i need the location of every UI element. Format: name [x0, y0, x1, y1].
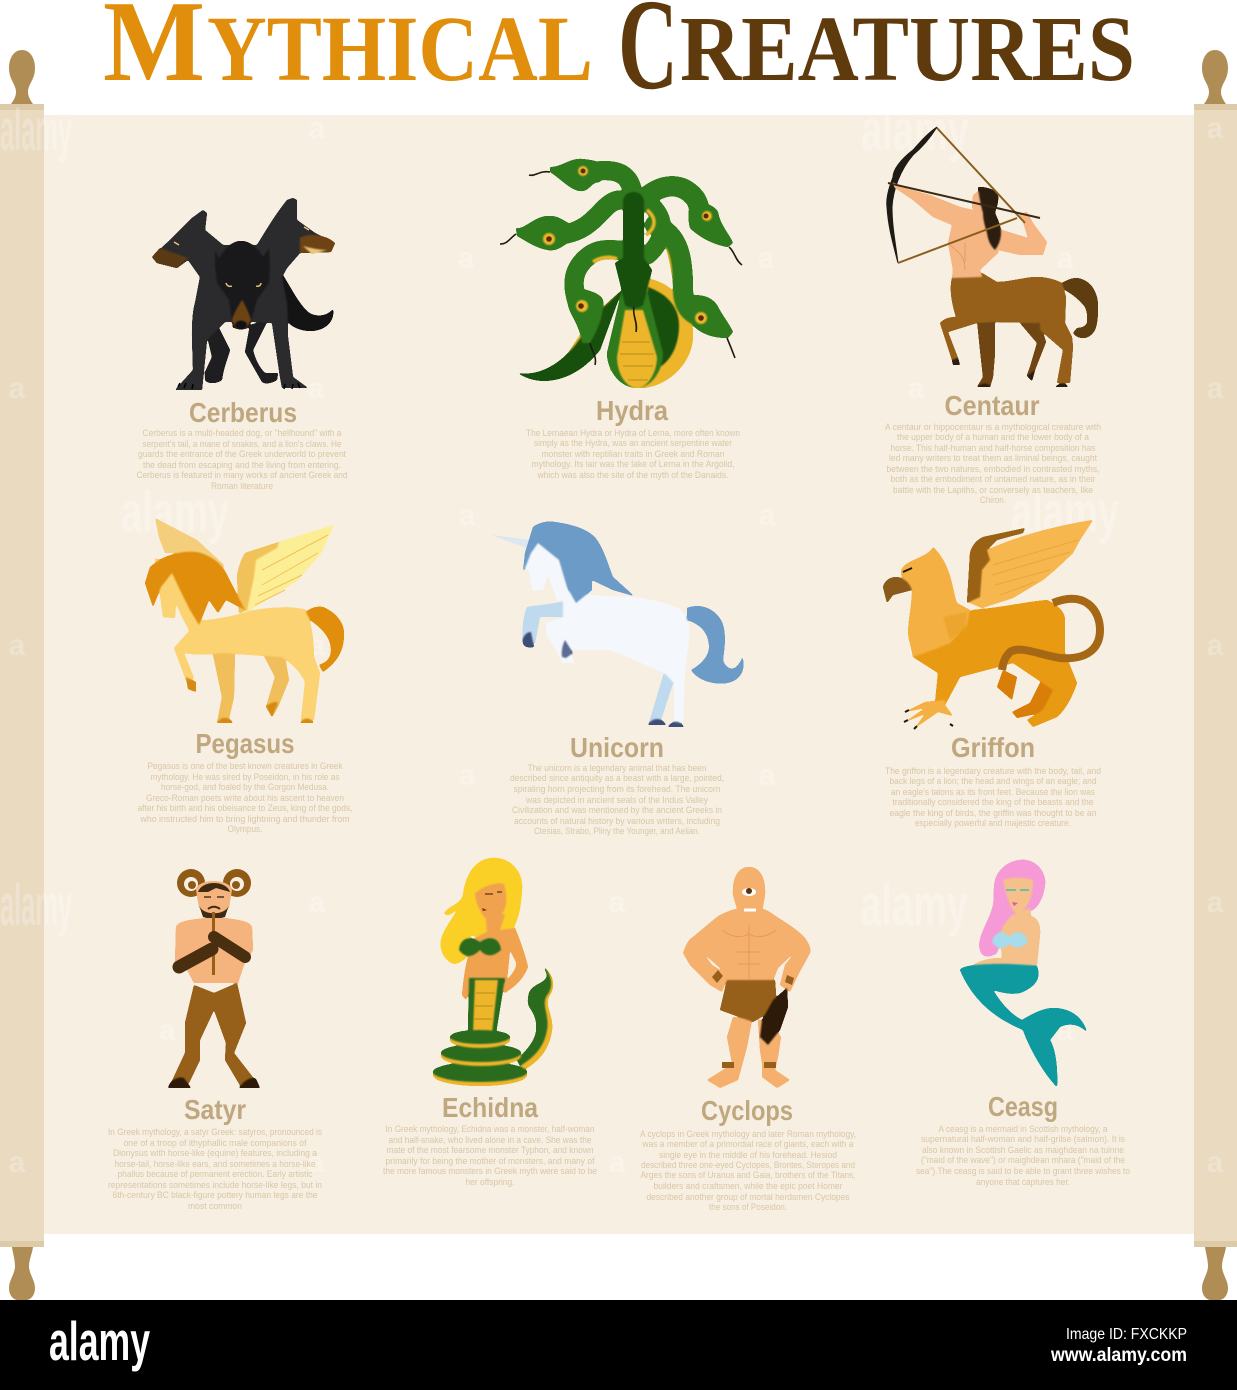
text block: Satyr [108, 1127, 322, 1211]
watermark pattern: a [459, 1014, 476, 1047]
footer bar: www.alamy.com [1050, 1345, 1187, 1366]
text block: Hydra: monster with reptilian traits in Greek and Roman [542, 449, 724, 459]
text block: Ceasg [916, 1124, 1130, 1187]
text block: Hydra: which was also the site of the myth of the Danaids. [537, 470, 728, 480]
text block: Cyclops: single eye in the middle of his forehead. Hesiod [659, 1150, 837, 1160]
text block: Pegasus: after his birth and his obeisance to Zeus, king of the gods, [138, 803, 352, 813]
watermark pattern: a [458, 242, 475, 275]
text block: Echidna: mate of the most fearsome monster Typhon, and known [386, 1145, 594, 1155]
text block: Echidna: In Greek mythology, Echidna was a monster, half-woman [386, 1124, 594, 1134]
text block: Cerberus: the dead from escaping and the living from entering. [143, 460, 341, 470]
heading: Ceasg: Ceasg [988, 1091, 1058, 1122]
text block: Hydra: mythology. Its lair was the lake of Lerna in the Argolid, [532, 459, 734, 469]
watermark pattern: a [9, 629, 26, 662]
creature: Ceasg [916, 860, 1130, 1187]
watermark pattern: a [1207, 1146, 1224, 1179]
text block: Griffon [885, 766, 1101, 828]
watermark pattern: a [309, 886, 326, 919]
watermark pattern: a [159, 1014, 176, 1047]
text block: Ceasg: also known in Scottish Gaelic as maighdean na tuinne [922, 1145, 1124, 1155]
text block: Unicorn: was depicted in ancient seals of the Indus Valley [525, 795, 708, 805]
text block: Unicorn [510, 763, 724, 836]
watermark pattern: a [759, 499, 776, 532]
watermark pattern: alamy [861, 98, 969, 163]
creature: Centaur [885, 127, 1101, 505]
icon: Hydra [500, 159, 742, 388]
text block: Satyr: Dionysus with horse-like (equine) features, including a [113, 1148, 317, 1158]
heading: Cerberus: Cerberus [189, 397, 297, 428]
watermark pattern: a [909, 629, 926, 662]
text block: Hydra: The Lernaean Hydra or Hydra of Lerna, more often known [526, 428, 740, 438]
heading: Echidna: Echidna [442, 1092, 538, 1123]
watermark pattern: a [1207, 112, 1224, 145]
creature: Unicorn [491, 522, 743, 836]
footer bar [0, 1300, 1237, 1390]
watermark pattern: a [758, 242, 775, 275]
icon: Echidna [433, 858, 553, 1086]
text block: Cyclops: described another group of mortal herdsmen Cyclopes [646, 1192, 850, 1202]
text block: Cyclops: A cyclops in Greek mythology and later Roman mythology, [640, 1129, 856, 1139]
creature: Griffon [883, 520, 1101, 828]
text block: Griffon: The griffon is a legendary creature with the body, tail, and [885, 766, 1101, 776]
icon: Unicorn [491, 522, 743, 727]
watermark pattern: alamy [0, 98, 72, 163]
text block: Cyclops: Arges the sons of Uranus and Gaia, brothers of the Titans, [640, 1170, 856, 1180]
watermark pattern: a [308, 372, 325, 405]
text block: Unicorn: accounts of natural history by various writers, including [514, 816, 720, 826]
footer bar: alamy [49, 1310, 150, 1372]
text block: Centaur: battle with the Lapiths, or conversely as teachers, like [893, 485, 1093, 495]
creature: Hydra [500, 159, 742, 480]
heading: Griffon: Griffon [951, 732, 1035, 763]
text block: Cerberus: guards the entrance of the Greek underworld to prevent [138, 449, 346, 459]
text block: Centaur [885, 422, 1101, 505]
text block: Cyclops: was a member of a primordial race of giants, each with a [642, 1139, 854, 1149]
text block: Satyr: representations sometimes include horse-like legs, but in [108, 1180, 322, 1190]
text block: Centaur: between the two natures, embodied in contrasted myths, [886, 464, 1100, 474]
text block: Unicorn: Ctesias, Strabo, Pliny the Younger, and Aelian. [534, 826, 700, 836]
icon: Cerberus [152, 198, 335, 390]
icon: Centaur [887, 127, 1098, 387]
text block: Pegasus: mythology. He was sired by Poseidon, in his role as [150, 772, 340, 782]
text block: Griffon: an eagle's talons as its front feet. Because the lion was [891, 787, 1095, 797]
text block: Centaur: led many writers to treat them as liminal beings, caught [889, 453, 1097, 463]
watermark pattern: a [759, 759, 776, 792]
creature: Cyclops [640, 867, 856, 1212]
text block: Cerberus: Cerberus is featured in many works of ancient Greek and [136, 470, 348, 480]
watermark pattern: a [459, 499, 476, 532]
watermark pattern: alamy [860, 873, 968, 938]
text block: Satyr: horse-tail, horse-like ears, and sometimes a horse-like [114, 1159, 316, 1169]
text block: Cerberus: Cerberus is a multi-headed dog, or "hellhound" with a [142, 428, 342, 438]
title: REATURES [680, 0, 1135, 101]
text block: Centaur: both as the embodiment of untamed nature, as in their [890, 474, 1096, 484]
watermark pattern: a [9, 372, 26, 405]
title: YTHICAL [207, 0, 593, 101]
text block: Echidna: her offspring. [466, 1177, 514, 1187]
text block: Centaur: horse. This half-human and half-horse composition has [890, 443, 1096, 453]
text block: Unicorn: described since antiquity as a beast with a large, pointed, [510, 773, 724, 783]
text block: Echidna: the more famous monsters in Greek myth were said to be [383, 1166, 597, 1176]
text block: Satyr: In Greek mythology, a satyr Greek: satyros, pronounced is [108, 1127, 322, 1137]
heading: Hydra: Hydra [596, 395, 668, 426]
text block: Satyr: most common [188, 1201, 242, 1211]
text block: Centaur: Chiron. [980, 495, 1006, 505]
watermark pattern: a [1057, 1014, 1074, 1047]
text block: Satyr: phallus because of permanent erection. Early artistic [118, 1169, 313, 1179]
text block: Griffon: traditionally considered the king of the beasts and the [892, 797, 1094, 807]
watermark pattern: a [609, 1146, 626, 1179]
watermark pattern [0, 98, 1224, 1179]
text block: Unicorn: spiraling horn projecting from its forehead. The unicorn [514, 784, 720, 794]
text block: Cyclops: the sons of Poseidon. [709, 1202, 787, 1212]
heading: Centaur: Centaur [944, 390, 1040, 421]
text block: Ceasg: sea").The ceasg is said to be able to grant three wishes to [916, 1166, 1130, 1176]
watermark pattern: a [1207, 886, 1224, 919]
watermark pattern: alamy [0, 873, 72, 938]
creature: Pegasus [138, 518, 352, 834]
text block: Echidna [383, 1124, 597, 1187]
text block: Ceasg: A ceasg is a mermaid in Scottish mythology, a [938, 1124, 1108, 1134]
watermark pattern: a [908, 372, 925, 405]
watermark pattern: a [309, 629, 326, 662]
text block: Unicorn: Civilization and was mentioned by the ancient Greeks in [512, 805, 722, 815]
heading: Cyclops: Cyclops [701, 1095, 793, 1126]
watermark pattern: alamy [1011, 480, 1119, 545]
creature: Echidna [383, 858, 597, 1187]
watermark pattern: a [9, 1146, 26, 1179]
text block: Pegasus: horse-god, and foaled by the Gorgon Medusa. [161, 782, 329, 792]
icon: Satyr [168, 869, 260, 1088]
text block: Pegasus [138, 761, 352, 834]
watermark pattern: a [609, 886, 626, 919]
heading: Unicorn: Unicorn [570, 732, 664, 763]
text block: Pegasus: Greco-Roman poets write about his ascent to heaven [146, 793, 344, 803]
text block: Echidna: primarily for being the mother of monsters, and many of [386, 1156, 595, 1166]
text block: Ceasg: anyone that captures her. [976, 1177, 1070, 1187]
text block: Cyclops: builders and craftsmen, while the epic poet Homer [654, 1181, 842, 1191]
text block: Cyclops: described three one-eyed Cyclopes, Brontes, Steropes and [641, 1160, 855, 1170]
icon: Cyclops [683, 867, 810, 1088]
watermark pattern: alamy [121, 480, 229, 545]
watermark pattern: a [309, 112, 326, 145]
text block: Hydra [526, 428, 740, 480]
text block: Cerberus: Roman literature [211, 481, 273, 491]
watermark pattern: a [1207, 372, 1224, 405]
creature: Satyr [108, 869, 322, 1211]
icon: Griffon [883, 520, 1100, 729]
text block: Unicorn: The unicorn is a legendary animal that has been [528, 763, 706, 773]
creature: Cerberus [136, 198, 348, 491]
footer bar: Image ID: FXCKKP [1066, 1326, 1187, 1343]
text block: Cyclops [640, 1129, 856, 1212]
text block: Cerberus [136, 428, 348, 491]
text block: Griffon: especially powerful and majestic creature. [915, 818, 1071, 828]
text block: Pegasus: Olympus. [228, 824, 262, 834]
watermark pattern: a [1207, 629, 1224, 662]
title [103, 0, 1135, 117]
heading: Pegasus: Pegasus [196, 728, 294, 759]
text block: Cerberus: serpent's tail, a mane of snakes, and a lion's claws. He [142, 439, 342, 449]
text block: Ceasg: supernatural half-woman and half-grilse (salmon). It is [921, 1134, 1125, 1144]
watermark pattern: a [459, 759, 476, 792]
text block: Pegasus: who instructed him to bring lightning and thunder from [140, 814, 350, 824]
text block: Satyr: 6th-century BC black-figure pottery human legs are the [112, 1190, 318, 1200]
text block: Ceasg: ("maid of the wave") or maighdean mhara ("maid of the [921, 1155, 1125, 1165]
watermark pattern: a [1057, 242, 1074, 275]
text block: Pegasus: Pegasus is one of the best known creatures in Greek [148, 761, 343, 771]
icon: Pegasus [145, 518, 344, 723]
text block: Centaur: A centaur or hippocentaur is a mythological creature with [885, 422, 1101, 432]
text block: Hydra: simply as the Hydra, was an ancient serpentine water [534, 438, 732, 448]
text block: Griffon: back legs of a lion; the head and wings of an eagle; and [890, 776, 1096, 786]
icon: Ceasg [960, 860, 1087, 1087]
text block: Echidna: and half-snake, who lived alone in a cave. She was the [388, 1135, 592, 1145]
text block: Centaur: the upper body of a human and the lower body of a [897, 432, 1089, 442]
text block: Griffon: eagle the king of birds, the griffin was thought to be an [890, 808, 1096, 818]
watermark pattern: a [308, 1146, 325, 1179]
text block: Satyr: one of a troop of ithyphallic male companions of [124, 1138, 307, 1148]
heading: Satyr: Satyr [184, 1094, 246, 1125]
